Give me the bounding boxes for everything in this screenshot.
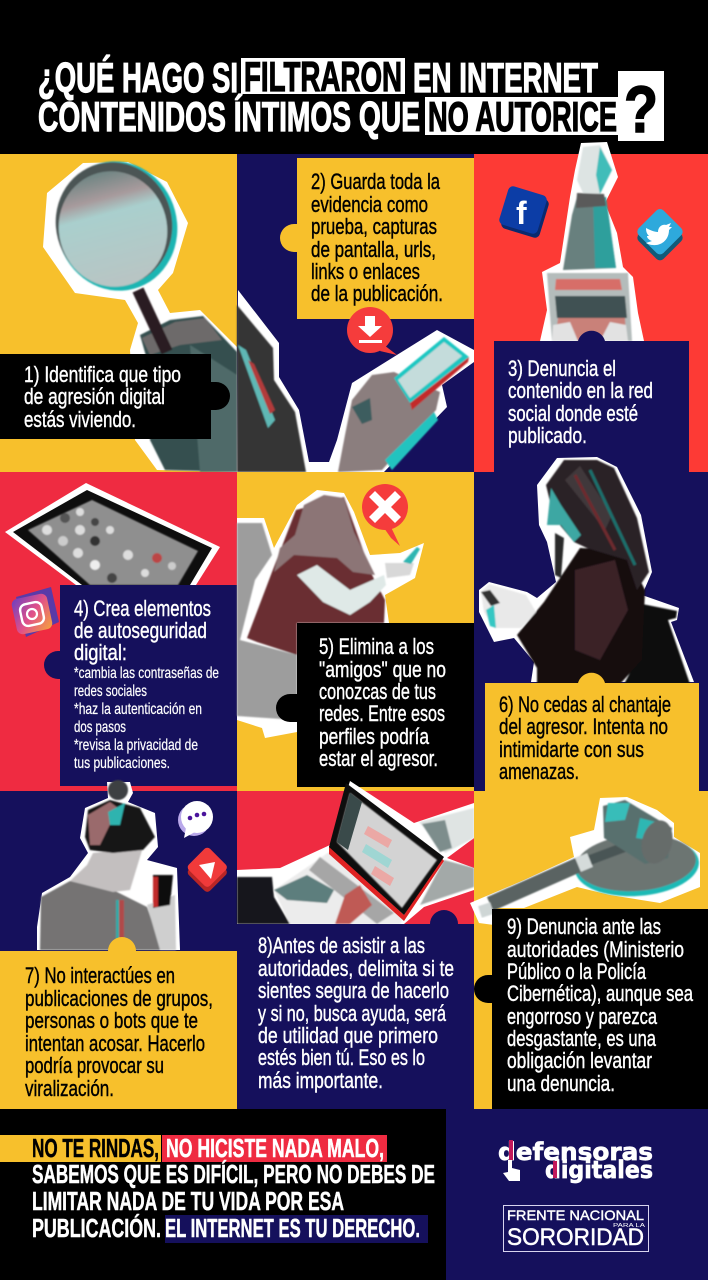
message text: SABEMOS QUE ES DIFÍCIL, PERO NO DEBES DE	[32, 1159, 435, 1189]
icon: facebook	[498, 185, 550, 239]
text box 1	[0, 354, 230, 439]
text box 4: dos pasos	[74, 719, 126, 736]
text box 4	[44, 585, 237, 786]
text box 3: social donde esté	[508, 401, 638, 426]
text box 2: prueba, capturas	[311, 214, 437, 239]
text box 7: publicaciones de grupos,	[25, 986, 213, 1011]
text box 9	[474, 909, 708, 1109]
text box 2: links o enlaces	[311, 259, 420, 284]
footer message	[0, 1109, 446, 1280]
message text: NO HICISTE NADA MALO,	[166, 1133, 384, 1163]
highlight: red	[162, 1135, 387, 1162]
panel 2: save evidence	[237, 154, 474, 472]
illustration: gavel	[470, 797, 701, 925]
text box 9: desgastante, es una	[507, 1026, 657, 1051]
icon: play diamond	[186, 846, 229, 894]
message text: EL INTERNET ES TU DERECHO.	[165, 1213, 420, 1243]
text box 2	[280, 158, 474, 319]
icon: facebook: f	[516, 195, 527, 231]
text box 8: más importante.	[258, 1068, 383, 1093]
text box 8: 8)Antes de asistir a las	[258, 933, 425, 958]
illustration: tablet	[5, 483, 220, 585]
icon: download bubble	[347, 307, 397, 355]
text box 6: intimidarte con sus	[499, 737, 644, 762]
text box 4: tus publicaciones.	[74, 755, 170, 772]
panel 8: before going to the authorities	[237, 781, 474, 1109]
logo: frente nacional para la sororidad: PARA LA	[613, 1223, 645, 1229]
panel 5: remove friends	[237, 472, 474, 791]
highlight: no autorice	[425, 93, 620, 140]
text box 5: perfiles podría	[319, 724, 430, 749]
text box 2: de pantalla, urls,	[311, 237, 436, 262]
text box 6	[485, 673, 699, 791]
logo: frente nacional para la sororidad: SORORIDAD	[507, 1224, 644, 1251]
text box 1: de agresión digital	[24, 384, 165, 409]
message text: LIMITAR NADA DE TU VIDA POR ESA	[32, 1186, 344, 1216]
icon: instagram	[11, 587, 59, 637]
text box 5: "amigos" que no	[319, 657, 446, 682]
text box 4: *haz la autenticación en	[74, 701, 202, 718]
highlight: navy	[165, 1215, 428, 1243]
highlight: yellow	[0, 1135, 161, 1162]
illustration: magnifying glass and hand	[42, 148, 237, 472]
logo: defensoras digitales: defensoras	[498, 1138, 653, 1166]
icon: delete bubble	[362, 484, 408, 546]
panel 3: report on network	[474, 142, 708, 472]
text box 5: conozcas de tus	[319, 679, 436, 704]
icon: twitter	[635, 207, 685, 262]
title line 1 end: EN INTERNET	[413, 54, 598, 101]
text box 8: sientes segura de hacerlo	[258, 978, 449, 1003]
text box 3: publicado.	[508, 423, 587, 448]
text box 9: 9) Denuncia ante las	[507, 914, 661, 939]
text box 3: contenido en la red	[508, 378, 653, 403]
text box 8: y si no, busca ayuda, será	[258, 1001, 447, 1026]
text box 4: 4) Crea elementos	[74, 596, 211, 621]
text box 4: redes sociales	[74, 683, 147, 700]
panel 1: identify	[0, 148, 237, 472]
text box 2: evidencia como	[311, 192, 428, 217]
illustration: woman with phone and backpack	[479, 457, 694, 684]
highlight: filtraron	[241, 53, 405, 100]
text box 8: estés bien tú. Eso es lo	[258, 1045, 425, 1070]
title line 1: ¿QUÉ HAGO SI	[38, 54, 238, 101]
text box 3: 3) Denuncia el	[508, 356, 616, 381]
text box 8: autoridades, delimita si te	[258, 956, 454, 981]
text box 9: obligación levantar	[507, 1048, 652, 1073]
text box 1: estás viviendo.	[24, 407, 136, 432]
text box 7: 7) No interactúes en	[25, 963, 175, 988]
text box 7	[0, 937, 237, 1109]
message text	[32, 1133, 435, 1243]
text box 2: 2) Guarda toda la	[311, 169, 441, 194]
icon: chat bubble	[178, 801, 213, 838]
logo: defensoras digitales	[498, 1138, 653, 1184]
message text: NO TE RINDAS,	[32, 1133, 159, 1163]
text box 3	[494, 331, 689, 472]
question mark: ?	[624, 72, 658, 146]
text box 8: de utilidad que primero	[258, 1023, 438, 1048]
text box 4: digital:	[74, 640, 127, 665]
text box 5: redes. Entre esos	[319, 701, 445, 726]
illustration: sleeve and hand holding phone	[237, 290, 474, 472]
panel 7: do not interact	[0, 780, 237, 1109]
title line 2: CONTENIDOS ÍNTIMOS QUE	[38, 93, 420, 140]
panel 9: report to authorities	[470, 791, 708, 1109]
logo: frente nacional para la sororidad	[504, 1206, 648, 1252]
panel 4: self-security	[0, 472, 237, 791]
message text: PUBLICACIÓN.	[32, 1213, 161, 1243]
logo: defensoras digitales: digitales	[545, 1156, 653, 1184]
text box 5	[276, 623, 474, 787]
text box 7: personas o bots que te	[25, 1008, 198, 1033]
text box 1: 1) Identifica que tipo	[24, 362, 181, 387]
panel 6: no blackmail	[474, 457, 708, 791]
text box 2: de la publicación.	[311, 281, 443, 306]
title	[38, 53, 664, 146]
footer logos panel	[446, 1109, 708, 1280]
illustration: laptop with hands	[237, 781, 474, 924]
highlight: filtraron: FILTRARON	[244, 53, 402, 100]
text box 4: *cambia las contraseñas de	[74, 665, 219, 682]
illustration: arm over laptop	[540, 142, 644, 341]
text box 5: 5) Elimina a los	[319, 634, 434, 659]
text box 9: Público o la Policía	[507, 959, 647, 984]
text box 7: podría provocar su	[25, 1053, 164, 1078]
text box 8	[237, 910, 474, 1109]
illustration: woman from behind with phone	[37, 780, 180, 950]
illustration: woman in chair	[237, 490, 424, 738]
text box 5: estar el agresor.	[319, 746, 438, 771]
text box 9: engorroso y parezca	[507, 1004, 658, 1029]
logo: frente nacional para la sororidad: FRENTE NACIONAL	[507, 1207, 644, 1223]
text box 9: una denuncia.	[507, 1071, 615, 1096]
text box 4: *revisa la privacidad de	[74, 737, 198, 754]
text box 4: de autoseguridad	[74, 618, 207, 643]
text box 7: intentan acosar. Hacerlo	[25, 1031, 205, 1056]
text box 7: viralización.	[25, 1076, 114, 1101]
text box 6: amenazas.	[499, 759, 579, 784]
